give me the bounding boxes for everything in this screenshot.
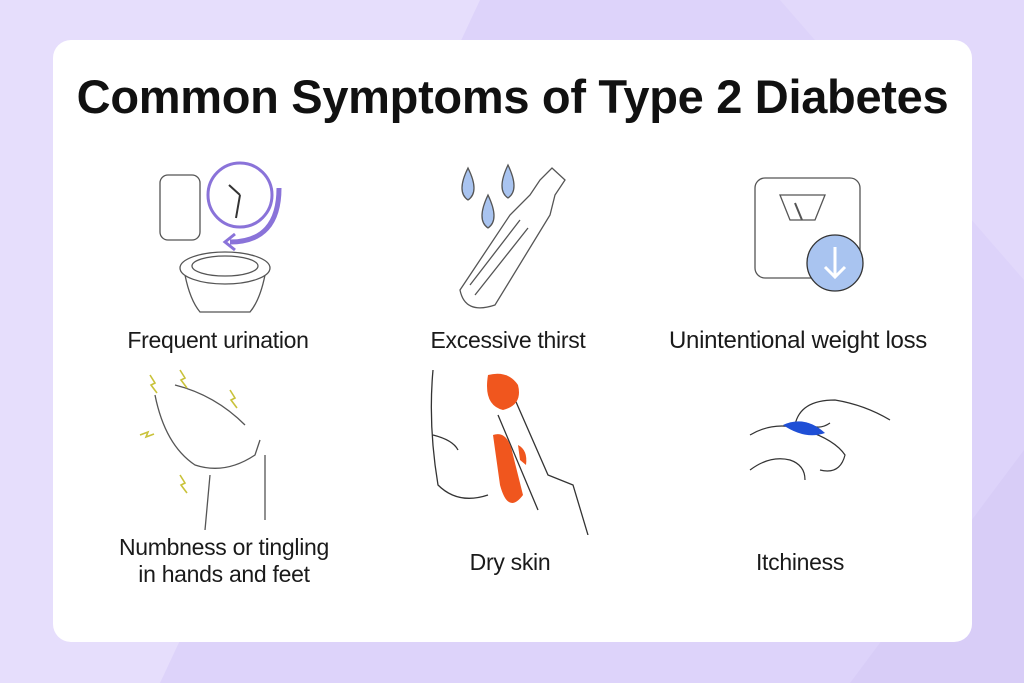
- label: weight loss: Unintentional weight loss: [669, 327, 927, 354]
- label: numbness: [119, 534, 329, 587]
- label: itchiness: Itchiness: [756, 549, 844, 575]
- icon: face with dry skin: [430, 370, 589, 535]
- icon: scale with down arrow: [754, 177, 864, 292]
- label: dry skin: Dry skin: [470, 549, 550, 575]
- icon: itchy hand: [750, 399, 890, 480]
- card panel: [53, 40, 972, 642]
- title: Common Symptoms of Type 2 Diabetes: [77, 70, 948, 123]
- icon: toilet with clock: [159, 162, 282, 313]
- icon: numb hands: [140, 370, 266, 530]
- label: numbness: in hands and feet: [138, 561, 310, 587]
- label: numbness: Numbness or tingling: [119, 534, 329, 560]
- icon: water drops and bottle: [459, 164, 566, 308]
- label: frequent urination: Frequent urination: [127, 327, 309, 353]
- label: excessive thirst: Excessive thirst: [431, 327, 585, 353]
